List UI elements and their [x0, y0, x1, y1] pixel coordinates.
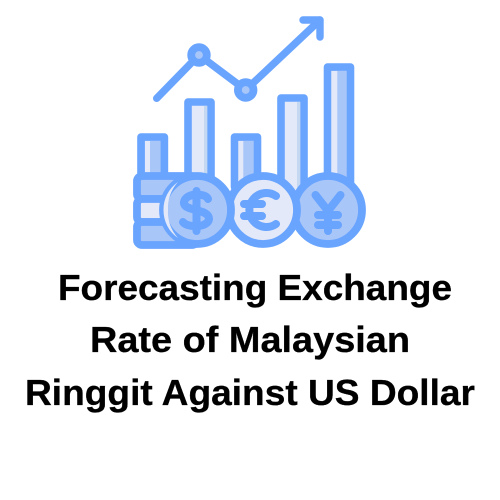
coin stack	[137, 176, 197, 245]
title: Rate of Malaysian	[90, 319, 410, 360]
icon: euro coin	[229, 176, 297, 244]
bar 2	[188, 102, 211, 192]
bar 4	[281, 98, 304, 198]
icon: yen coin	[294, 176, 362, 244]
bar 5	[328, 67, 350, 197]
bar chart	[141, 67, 350, 198]
bar 1	[141, 137, 164, 187]
title	[25, 267, 475, 413]
trend line with arrow	[157, 20, 320, 98]
title: Ringgit Against US Dollar	[25, 372, 475, 413]
icon: rising bars, trend line and currency coins	[137, 20, 362, 245]
title: Forecasting Exchange	[58, 267, 452, 308]
icon: dollar coin	[163, 176, 231, 244]
bar 3	[234, 137, 258, 187]
